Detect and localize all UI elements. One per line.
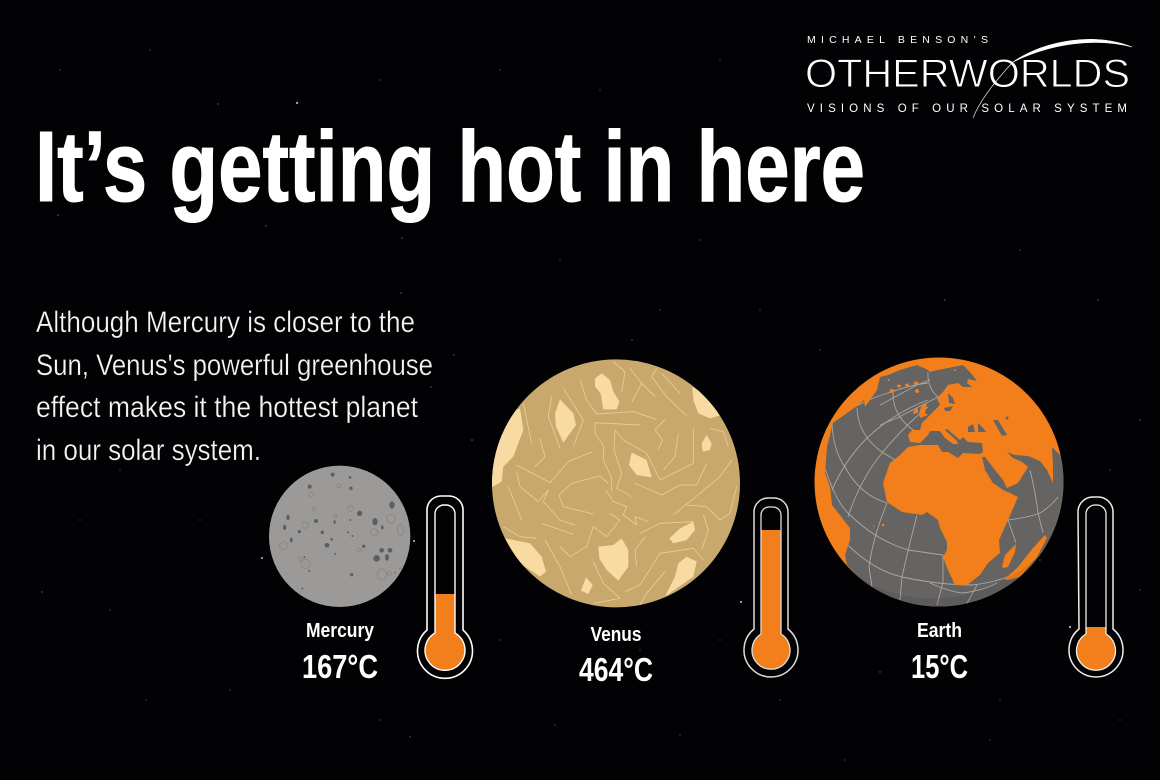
- label: Earth 15°C: Earth: [917, 620, 962, 642]
- title: It’s getting hot in here: [35, 111, 865, 223]
- label: Mercury 167°C: [302, 620, 378, 685]
- logo: Otherworlds: [805, 34, 1132, 118]
- thermometer: Earth: [1069, 497, 1123, 677]
- intro text block: [36, 306, 433, 467]
- islands and southern landmasses: [873, 369, 1047, 580]
- label: Venus 464°C: 464°C: [579, 651, 653, 688]
- planet: Earth: [814, 358, 1064, 606]
- planet: Venus: [487, 359, 740, 607]
- thermometer: Mercury: [418, 496, 473, 678]
- logo: Otherworlds: OTHERWORLDS: [805, 52, 1130, 96]
- intro text block: in our solar system.: [36, 434, 261, 467]
- logo: Otherworlds: VISIONS OF OUR SOLAR SYSTEM: [807, 103, 1127, 115]
- label: Venus 464°C: [579, 624, 653, 688]
- inland seas: [944, 393, 1008, 436]
- intro text block: Sun, Venus's powerful greenhouse: [36, 349, 433, 382]
- thermometer: Venus: [744, 498, 798, 677]
- intro text block: effect makes it the hottest planet: [36, 391, 419, 424]
- label: Earth 15°C: [911, 620, 968, 685]
- label: Earth 15°C: 15°C: [911, 648, 968, 685]
- label: Mercury 167°C: Mercury: [306, 620, 375, 642]
- label: Mercury 167°C: 167°C: [302, 648, 378, 685]
- limb shading: [871, 560, 1035, 605]
- planet: Mercury: [269, 466, 410, 607]
- label: Venus 464°C: Venus: [590, 624, 642, 646]
- logo: Otherworlds: MICHAEL BENSON’S: [807, 34, 988, 46]
- intro text block: Although Mercury is closer to the: [36, 306, 415, 339]
